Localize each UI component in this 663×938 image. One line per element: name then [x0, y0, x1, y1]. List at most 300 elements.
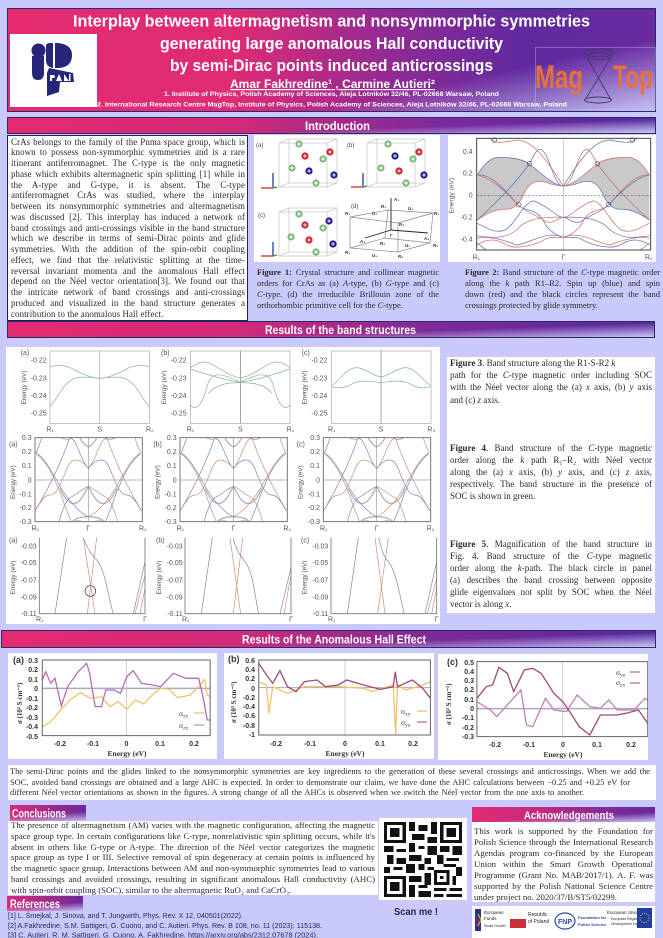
- panel: introduction text: which we describe in terms of semi-Dirac points and glide: [11, 233, 245, 243]
- figure 3 panel c: (c): [302, 350, 310, 357]
- figure 4 panel b: Energy (eV): [154, 465, 161, 499]
- figure 5 panel b: -0.09: [167, 594, 183, 601]
- logo: Foundation for Polish Science: FNP: [558, 919, 572, 926]
- figure 2: band structure: Energy (eV): [448, 178, 455, 213]
- figure 1: crystal structures: R₁: [345, 211, 350, 216]
- figure 3 panel b: -0.25: [171, 411, 187, 418]
- logo: Foundation for Polish Science: [555, 913, 607, 929]
- figure 4 panel a: 0: [28, 477, 32, 484]
- figure 2: band structure: R₂: [645, 254, 653, 261]
- figure 3 panel c: R₁: [328, 427, 336, 434]
- heading: Conclusions: Conclusions: [12, 808, 66, 820]
- chart: AHE panel a: 0.1: [28, 677, 38, 684]
- figure 3 panel b: -0.24: [171, 393, 187, 400]
- logo: Foundation for Polish Science: Polish Science: [578, 922, 607, 927]
- chart: AHE panel b: -0.4: [243, 704, 255, 711]
- figure 3 panel a: (a): [21, 350, 29, 357]
- figure 4 panel a: -0.2: [20, 505, 32, 512]
- heading: References: References: [10, 899, 60, 911]
- figure 4 panel b: 0.1: [167, 463, 177, 470]
- caption: figure 4: along the (a) x axis, (b) y axis, and (c) z axis,: [450, 467, 652, 477]
- panel: introduction text: band crossings and anti-crossings visible in the band structure: [11, 222, 245, 232]
- figure 5 panel b: -0.05: [167, 560, 183, 567]
- figure 5 panel c: -0.03: [312, 543, 328, 550]
- figure 5 panel c: R₁: [328, 617, 336, 624]
- text block: acknowledgements: Union within the Smart Growth Operational: [474, 859, 653, 869]
- figure 3 panel c: -0.23: [311, 375, 327, 382]
- caption: figure 5: [450, 539, 652, 609]
- chart: AHE panel c: 0.5: [464, 660, 474, 667]
- caption: figure 2: along the k path R1–R2. Spin up (blue) and spin: [465, 278, 660, 288]
- chart: AHE panel a: 0.3: [28, 658, 38, 665]
- caption: figure 3: and (c) z axis.: [450, 395, 500, 405]
- panel: introduction text: reversal invariant momenta and the anomalous Hall effect: [11, 266, 245, 276]
- chart: AHE panel c: -0.2: [462, 725, 474, 732]
- figure 4 panel c: -0.2: [308, 505, 320, 512]
- figure 4 panel b: R₁: [177, 526, 185, 533]
- chart: AHE panel a: 0: [34, 686, 38, 693]
- chart: AHE panel b: 0.6: [245, 658, 255, 665]
- chart: AHE panel c: -0.3: [462, 734, 474, 741]
- text block: conclusions: with spin-orbit coupling (SOC), similar to the altermagnetic RuO₂ and CaCrO₃.: [11, 885, 291, 895]
- figure 5 panel c: -0.05: [312, 560, 328, 567]
- caption: figure 2: [465, 267, 660, 310]
- figure 4 panel b: -0.2: [165, 505, 177, 512]
- chart: AHE panel b: (b): [228, 654, 240, 664]
- title text: generating large anomalous Hall conductivity: [160, 34, 504, 53]
- figure 4 panel a: -0.3: [20, 519, 32, 526]
- figure 5 panel b: R₁: [182, 617, 190, 624]
- caption: figure 4: respectively. The band structure in the presence of: [450, 479, 652, 489]
- figure 3 panel a: -0.22: [31, 357, 47, 364]
- heading: Introduction: Introduction: [305, 121, 370, 133]
- figure 3 panel b: [161, 350, 295, 434]
- text block: acknowledgements: Programme (Grant No. MAB/2017/1). A. F. was: [474, 870, 653, 880]
- chart: AHE panel b: yz: [405, 722, 411, 728]
- figure 4 panel b: -0.1: [165, 491, 177, 498]
- figure 3 panel b: Energy (eV): [161, 371, 168, 404]
- figure 4 panel c: R₁: [320, 526, 328, 533]
- chart: AHE panel c: zx: [620, 682, 625, 688]
- panel: introduction text: [7, 135, 248, 321]
- figure 3 panel a: -0.25: [31, 411, 47, 418]
- figure 5 panel c: Energy (eV): [302, 561, 309, 594]
- chart: AHE panel c: σ: [616, 668, 620, 677]
- text block: conclusions: [8, 821, 378, 895]
- title text: 2. International Research Centre MagTop, Institute of Physics, Polish Academy of Sciences, Aleja Lotników 32/46, PL-02668 Warsaw, Poland: [97, 102, 567, 108]
- figure 2: band structure: Γ: [561, 254, 565, 261]
- chart: AHE panel c: -0.1: [462, 715, 474, 722]
- caption: figure 5: order along the k-path. The black circle in panel: [450, 563, 652, 573]
- chart: AHE panel b: σ (10³ S cm⁻¹): [230, 681, 238, 723]
- chart: AHE panel b: 0: [251, 686, 255, 693]
- chart: AHE panel c: 0.4: [464, 669, 474, 676]
- text block: acknowledgements: Polish Science through the International Research: [474, 837, 653, 847]
- panel: introduction text: depend on the Néel vector orientation[3]. We found out that: [11, 276, 245, 286]
- chart: AHE panel b: 0: [343, 741, 347, 748]
- figure 1: crystal structures: A₁: [360, 239, 365, 244]
- figure 2: band structure: [448, 135, 656, 262]
- chart: AHE panel c: [438, 654, 648, 760]
- title text: [73, 12, 590, 108]
- figure 4 panel c: R₂: [427, 526, 435, 533]
- figure 2: band structure: -0.2: [461, 215, 473, 222]
- panel: introduction text: phase which exhibits altermagnetic spin splitting [1] while in: [11, 169, 245, 179]
- panel: introduction text: produced and visualized in the band structure generates a: [11, 298, 245, 308]
- logo: European Union: European Union: [607, 910, 640, 915]
- figure 3 panel a: -0.23: [31, 375, 47, 382]
- heading: Conclusions: [10, 805, 86, 821]
- figure 3 panel c: -0.25: [311, 411, 327, 418]
- chart: AHE panel b: -0.2: [270, 741, 282, 748]
- caption: figure 3: [450, 358, 652, 405]
- figure 4 panel b: R₂: [283, 526, 291, 533]
- figure 5 panel a: -0.05: [21, 560, 37, 567]
- figure 4 panel c: 0.2: [310, 449, 320, 456]
- chart: AHE panel b: xy: [405, 712, 411, 718]
- heading: Acknowledgements: [472, 807, 655, 822]
- chart: AHE panel a: zx: [183, 726, 188, 732]
- chart: AHE panel a: -0.1: [87, 741, 99, 748]
- logo: MagTop: Mag: [536, 59, 583, 95]
- panel: band structure figures 3, 4, 5: [6, 347, 440, 624]
- figure 1: crystal structures: R₁: [434, 211, 439, 216]
- figure 5 panel c: [301, 537, 439, 624]
- panel: introduction text: the intricate network of band crossings and anti-crossings: [11, 287, 245, 297]
- text block: acknowledgements: under project no. 2020/37/B/ST5/02299.: [474, 892, 617, 902]
- figure 1: crystal structures: A₂: [424, 236, 429, 241]
- text block: references: [2] A.Fakhredine, S.M. Sattigeri, G. Cuono, and C. Autieri. Phys. Rev. B 108, no. 11 (2023): 115138.: [8, 923, 322, 930]
- panel: introduction text: was discussed [2]. This interplay has induced a network of: [11, 212, 245, 222]
- figure 2: band structure: 0.2: [463, 171, 473, 178]
- logo: MagTop: [535, 47, 656, 110]
- chart: AHE panel a: Energy (eV): [108, 749, 147, 758]
- figure 1: crystal structures: R₂: [433, 243, 438, 248]
- chart: AHE panel a: σ (10³ S cm⁻¹): [16, 682, 24, 724]
- figure 2: band structure: 0.4: [463, 149, 473, 156]
- caption: figure 3: path for the C-type magnetic order including SOC: [450, 370, 652, 380]
- heading: References: [7, 896, 83, 911]
- title text: Amar Fakhredine¹ , Carmine Autieri²: [230, 77, 435, 91]
- logo: Foundation for Polish Science: Foundation for: [578, 915, 607, 920]
- text block: conclusions: the magnetic space group. Interactions between AM and non-symmorphic symmetries lead to various: [11, 863, 375, 873]
- logo: European Funds: Funds: [484, 916, 497, 921]
- chart: AHE panel a: 0.1: [155, 741, 165, 748]
- figure 5 panel a: R₁: [36, 617, 44, 624]
- figure 4 panel b: -0.3: [165, 519, 177, 526]
- chart: AHE panel c: (c): [447, 657, 458, 667]
- heading: Introduction: [7, 117, 656, 134]
- panel: introduction text: itinerant antiferromagnet. The C-type is the only magnetic: [11, 158, 245, 168]
- logo: European Funds: Smart Growth: [484, 924, 506, 928]
- figure 4 panel c: 0.3: [310, 435, 320, 442]
- chart: AHE panel b: -1: [249, 732, 255, 739]
- figure 4 panel c: [297, 435, 435, 533]
- heading: Acknowledgements: Acknowledgements: [524, 810, 614, 822]
- caption: figure 3: Figure 3. Band structure along the R1-S-R2 k: [450, 358, 615, 368]
- figure 5 panel c: -0.09: [312, 594, 328, 601]
- caption: figure 2: down (red) and the black circles represent the band: [465, 289, 660, 299]
- panel: introduction text: symmetries. With the addition of the spin-orbit coupling: [11, 244, 245, 254]
- figure 1: crystal structures: R₁: [398, 254, 403, 259]
- title text: by semi-Dirac points induced anticrossings: [170, 56, 493, 75]
- chart: AHE panel c: 0.1: [592, 742, 602, 749]
- chart: AHE panel c: 0: [470, 706, 474, 713]
- chart: AHE panel b: Energy (eV): [326, 749, 365, 758]
- figure 2: band structure: -0.4: [461, 237, 473, 244]
- figure 4 panel a: R₂: [139, 526, 147, 533]
- caption: figure 4: [450, 443, 652, 501]
- figure 5 panel c: -0.07: [312, 577, 328, 584]
- logo: Republic of Poland: [510, 910, 549, 928]
- text block: conclusions: space group type. In certain configurations like C-type, nonrelativistic spin splitting occurs, while it's: [11, 831, 375, 841]
- figure 1: crystal structures: R₁: [381, 204, 386, 209]
- figure 3 panel a: S: [97, 427, 102, 434]
- chart: AHE panel c: 0: [561, 742, 565, 749]
- chart: AHE panel a: -0.2: [26, 705, 38, 712]
- figure 4 panel a: R₁: [32, 526, 40, 533]
- figure 3 panel a: [21, 350, 154, 434]
- logo: European Union: Development Fund: [611, 922, 641, 926]
- figure 1: crystal structures: Γ: [390, 233, 393, 238]
- caption: figure 5: Figure 5. Magnification of the band structure in: [450, 539, 652, 549]
- figure 1: crystal structures: R₂: [380, 241, 385, 246]
- chart: AHE panel a: [8, 653, 217, 759]
- caption: figure 4: Figure 4. Band structure of the C-type magnetic: [450, 443, 652, 453]
- chart: AHE panel b: -0.6: [243, 713, 255, 720]
- chart: AHE panel c: 0.2: [626, 742, 636, 749]
- figure 4 panel a: [9, 435, 147, 533]
- panel: introduction text: known to possess non-symmorphic symmetries and is a rare: [11, 147, 245, 157]
- chart: AHE panel c: σ (10³ S cm⁻¹): [445, 683, 453, 725]
- caption: figure 2: Figure 2: Band structure of the C-type magnetic order: [465, 267, 660, 277]
- figure 4 panel b: Γ: [231, 526, 235, 533]
- chart: AHE panel a: xy: [183, 714, 189, 720]
- figure 3 panel b: -0.23: [171, 375, 187, 382]
- text block: acknowledgements: [472, 822, 655, 902]
- chart: AHE panel b: -0.8: [243, 723, 255, 730]
- heading: Results of the band structures: Results of the band structures: [265, 325, 416, 337]
- chart: AHE panel c: yz: [620, 672, 626, 678]
- logo: European Union: European Regional: [611, 917, 641, 921]
- title banner: [7, 8, 656, 112]
- caption: figure 3: with the Néel vector along the (a) x axis, (b) y axis: [450, 382, 652, 392]
- logo: Republic of Poland: of Poland: [528, 919, 549, 925]
- figure 5 panel c: (c): [301, 537, 309, 544]
- chart: AHE panel b: 0.2: [408, 741, 418, 748]
- figure 4 panel c: Energy (eV): [298, 465, 305, 499]
- chart: AHE panel c: Energy (eV): [544, 750, 583, 759]
- figure 3 panel c: Energy (eV): [302, 371, 309, 404]
- figure 4 panel c: -0.3: [308, 519, 320, 526]
- figure 5 panel a: -0.09: [21, 594, 37, 601]
- caption: figure 1: C-type. (d) the irreducible Brillouin zone of the: [257, 289, 439, 299]
- text block: references: [1] L. Šmejkal, J. Sinova, and T. Jungwirth, Phys. Rev. X 12, 040501(2022).: [8, 911, 243, 920]
- chart: AHE panel a: σ: [179, 709, 183, 718]
- text block: conclusions: space group as type I or III. Selective removal of spin degeneracy at certain points is influenced by: [11, 852, 375, 862]
- chart: AHE panel b: 0.4: [245, 667, 255, 674]
- figure 1: crystal structures: U₁: [372, 211, 377, 216]
- figure 1: crystal structures: A₃: [394, 197, 399, 202]
- chart: AHE panel a: (a): [13, 655, 24, 665]
- chart: AHE panel a: 0: [125, 741, 129, 748]
- figure 4 panel b: (b): [153, 442, 162, 449]
- figure 4 panel c: 0: [316, 477, 320, 484]
- text block: acknowledgements: Agendas program co-financed by the European: [474, 848, 653, 858]
- figure 4 panel a: 0.1: [22, 463, 32, 470]
- chart: AHE panel b: -0.2: [243, 695, 255, 702]
- chart: AHE panel b: -0.1: [304, 741, 316, 748]
- chart: AHE panel a: -0.3: [26, 715, 38, 722]
- figure 5 panel a: Energy (eV): [10, 561, 17, 594]
- figure 2: band structure: 0: [469, 193, 473, 200]
- figure 5 panel a: [9, 537, 147, 624]
- figure 5 panel b: -0.11: [167, 611, 183, 618]
- figure 4 panel b: 0: [173, 477, 177, 484]
- figure 4 panel a: 0.3: [22, 435, 32, 442]
- figure 3 panel a: -0.24: [31, 393, 47, 400]
- chart: AHE panel b: 0.2: [245, 676, 255, 683]
- figure 1: crystal structures: U₁: [405, 243, 410, 248]
- chart: AHE panel c: 0.2: [464, 687, 474, 694]
- figure 3 panel b: R₂: [287, 427, 295, 434]
- caption: figure 1: [257, 267, 439, 310]
- chart: AHE panel a: -0.5: [26, 734, 38, 741]
- caption: figure 4: order along the k path R₁–R₂ with Néel vector: [450, 455, 652, 465]
- figure 5 panel c: -0.11: [313, 611, 328, 618]
- caption: figure 5: Fig. 4. Band structure of the C-type magnetic: [450, 551, 652, 561]
- caption: figure 1: Figure 1: Crystal structure and collinear magnetic: [257, 267, 439, 277]
- figure 3 panel b: S: [238, 427, 243, 434]
- logo: IFPAN: [10, 34, 97, 107]
- figure 4 panel a: Γ: [86, 526, 90, 533]
- heading: Results of the Anomalous Hall Effect: [1, 630, 656, 648]
- figure 5 panel b: Energy (eV): [156, 561, 163, 594]
- figure 4 panel b: 0.3: [167, 435, 177, 442]
- logo: European Union: [607, 908, 652, 928]
- QR code: [379, 818, 467, 900]
- figure 5 panel a: Γ: [143, 617, 147, 624]
- figure 4 panel a: (a): [9, 442, 18, 449]
- panel: introduction text: the A-type and G-type, it is absent. The C-type: [11, 180, 245, 190]
- figure 5 panel b: Γ: [289, 617, 293, 624]
- figure 1: crystal structures: (b): [347, 143, 354, 149]
- figure 1: crystal structures: (a): [256, 143, 263, 149]
- figure 1: crystal structures: U₁: [408, 206, 413, 211]
- chart: AHE panel c: -0.2: [489, 742, 501, 749]
- figure 4 panel c: 0.1: [310, 463, 320, 470]
- text block: references: [8, 911, 322, 938]
- title text: 1. Institute of Physics, Polish Academy of Sciences, Aleja Lotników 32/46, PL-02668 Warsaw, Poland: [164, 91, 499, 98]
- figure 1: crystal structures: (c): [258, 213, 265, 219]
- figure 3 panel c: -0.22: [311, 357, 327, 364]
- figure 1: crystal structures: R₁: [345, 250, 350, 255]
- figure 3 panel c: R₃: [427, 427, 435, 434]
- caption: figure 5: (a) describes the band crossing between opposite: [450, 575, 652, 585]
- chart: AHE panel a: -0.1: [26, 696, 38, 703]
- panel: introduction text: effect, we find that the relativistic splitting at the time-: [11, 255, 245, 265]
- figure 3 panel c: -0.24: [311, 393, 327, 400]
- figure 2: band structure: R₁: [473, 254, 481, 261]
- heading: Results of the band structures: [7, 321, 655, 338]
- caption: figure 1: orthorhombic primitive cell for the C-type.: [257, 300, 403, 310]
- panel: introduction text: contribution to the anomalous Hall effect.: [11, 308, 163, 318]
- captions: figures 3, 4, 5: [447, 357, 655, 613]
- figure 3 panel b: R₁: [187, 427, 195, 434]
- logo: European Funds: [475, 909, 506, 931]
- chart: AHE panel b: σ: [401, 718, 405, 727]
- chart: AHE panel c: 0.3: [464, 678, 474, 685]
- chart: AHE panel b: [224, 653, 434, 759]
- figure 5 panel c: Γ: [435, 617, 439, 624]
- figure 3 panel a: R₂: [146, 427, 154, 434]
- figure 4 panel a: Energy (eV): [10, 465, 17, 499]
- figure 4 panel b: 0.2: [167, 449, 177, 456]
- text block: AHE description: [8, 765, 656, 800]
- panel: introduction text: antiferromagnet CrAs was studied, where the interplay: [11, 190, 245, 200]
- figure 5 panel a: -0.11: [21, 611, 37, 618]
- figure 3 panel b: -0.22: [171, 357, 187, 364]
- text block: conclusions: The presence of altermagnetism (AM) varies with the magnetic configuration, affecting the magnetic: [11, 820, 375, 830]
- figure 3 panel b: (b): [161, 350, 170, 357]
- caption: figure 1: orders for CrAs as (a) A-type, (b) G-type and (c): [257, 278, 439, 288]
- caption: figure 5: vector is along x.: [450, 599, 512, 609]
- panel: introduction text: between its nonsymmorphic symmetries and altermagnetism: [11, 201, 245, 211]
- figure 3 panel a: Energy (eV): [21, 371, 28, 404]
- chart: AHE panel a: σ: [179, 721, 183, 730]
- chart: AHE panel a: 0.2: [189, 741, 199, 748]
- figure 4 panel a: -0.1: [20, 491, 32, 498]
- panel: introduction text: CrAs belongs to the family of the Pnma space group, which is: [11, 136, 245, 146]
- text block: conclusions: absent in others like G-type or A-type. The direction of the Néel vector categorizes the magnetic: [11, 842, 375, 852]
- figure 4 panel b: [153, 435, 291, 533]
- figure 3 panel c: S: [379, 427, 384, 434]
- chart: AHE panel b: 0.1: [375, 741, 385, 748]
- figure 4 panel c: -0.1: [308, 491, 320, 498]
- figure 1: crystal structures: R₂: [399, 222, 404, 227]
- title text: Interplay between altermagnetism and nonsymmorphic symmetries: [73, 12, 590, 30]
- chart: AHE panel b: σ: [401, 707, 405, 716]
- figure 1: crystal structures: [254, 135, 440, 262]
- text block: AHE description: different Néel vector orientations as shown in the figures. A strong change of all the AHCs is observed when we switch the Néel vector from the one axis to another.: [10, 788, 584, 797]
- figure 5 panel a: -0.03: [21, 543, 37, 550]
- text block: conclusions: band crossings and avoided crossings, resulting in significant anomalous Hall conductivity (AHC): [11, 874, 375, 884]
- figure 5 panel b: -0.03: [167, 543, 183, 550]
- heading: Results of the Anomalous Hall Effect: Results of the Anomalous Hall Effect: [242, 634, 426, 646]
- chart: AHE panel a: 0.2: [28, 667, 38, 674]
- caption: figure 5: glide eigenvalues not split by SOC when the Néel: [450, 587, 652, 597]
- caption: figure 2: crossings protected by glide symmetry.: [465, 300, 598, 310]
- text block: AHE description: The semi-Dirac points and the glides linked to the nonsymmorphic symmetries are key ingredients to the generation of these several crossings and anticrossings. When we add the: [10, 767, 650, 776]
- chart: AHE panel c: σ: [616, 678, 620, 687]
- figure 5 panel b: -0.07: [167, 577, 183, 584]
- chart: AHE panel c: 0.1: [464, 697, 474, 704]
- figure 5 panel a: (a): [9, 537, 18, 544]
- figure 4 panel a: 0.2: [22, 449, 32, 456]
- figure 4 panel c: (c): [297, 442, 305, 449]
- caption: figure 4: SOC is shown in green.: [450, 491, 535, 501]
- funding logos: [472, 906, 655, 938]
- text block: AHE description: SOC, avoided band crossings are obtained and a large AHC is expected. In order to demonstrate our claim, we have done the AHC calculations between −0.25 and +0.25 eV for: [10, 778, 630, 786]
- text block: acknowledgements: supported by the Polish National Science Centre: [474, 881, 653, 891]
- logo: Republic of Poland: Republic: [528, 912, 548, 918]
- figure 5 panel a: -0.07: [21, 577, 37, 584]
- logo: European Funds: European: [484, 910, 504, 915]
- figure 5 panel b: [156, 537, 293, 624]
- figure 1: crystal structures: U₁: [372, 253, 377, 258]
- chart: AHE panel c: -0.1: [523, 742, 535, 749]
- figure 3 panel a: R₁: [46, 427, 54, 434]
